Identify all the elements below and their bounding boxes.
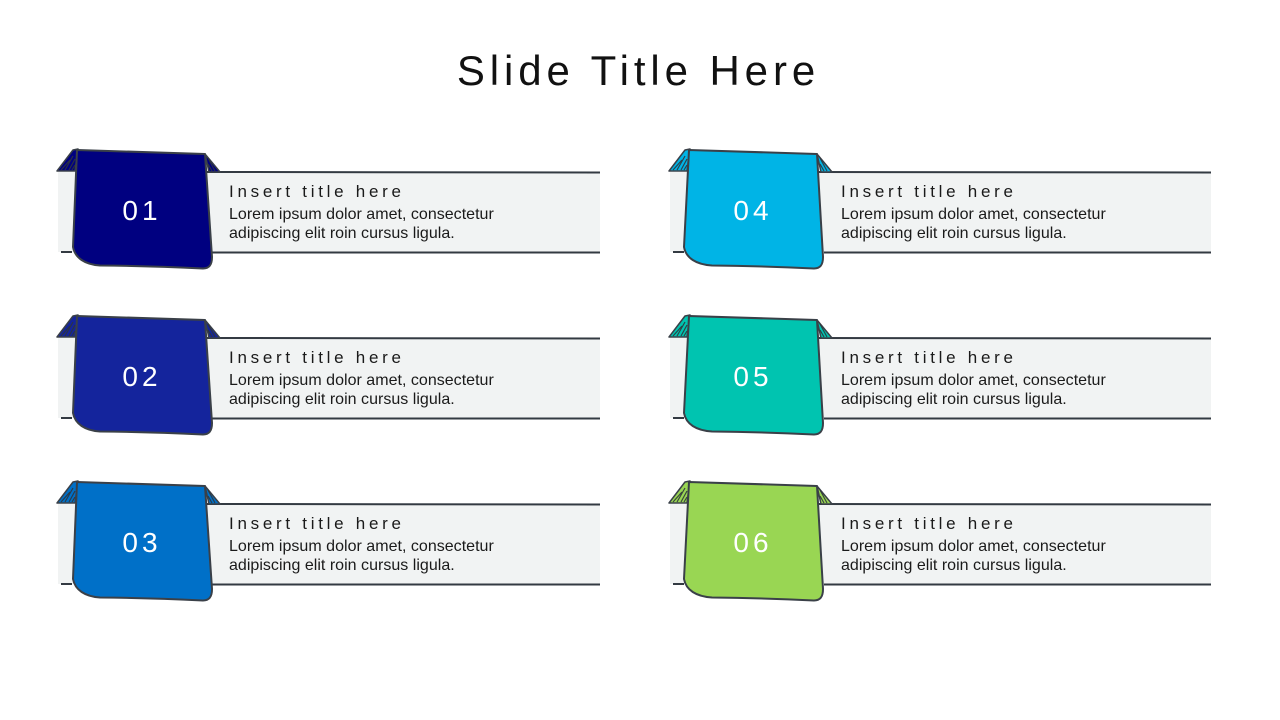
ribbon tab xyxy=(684,150,823,268)
panel: item 01 xyxy=(57,149,600,268)
item description: adipiscing elit roin cursus ligula. xyxy=(229,557,455,574)
item description: Lorem ipsum dolor amet, consectetur xyxy=(229,372,494,389)
panel: item 05 xyxy=(669,315,1211,434)
number: 06 xyxy=(733,527,773,558)
number: 04 xyxy=(733,195,773,226)
item heading: Insert title here xyxy=(841,514,1017,533)
item heading: Insert title here xyxy=(229,348,405,367)
text band xyxy=(670,338,1211,418)
text band xyxy=(670,504,1211,584)
title: Slide Title Here xyxy=(457,47,820,94)
panel: item 04 xyxy=(669,149,1211,268)
item description: Lorem ipsum dolor amet, consectetur xyxy=(229,538,494,555)
number: 03 xyxy=(122,527,162,558)
ribbon tab xyxy=(73,482,212,600)
ribbon tab xyxy=(684,482,823,600)
number: 01 xyxy=(122,195,162,226)
item description: adipiscing elit roin cursus ligula. xyxy=(229,225,455,242)
icon: ribbon folds xyxy=(57,149,220,172)
ribbon tab xyxy=(73,316,212,434)
icon: ribbon folds xyxy=(57,315,220,338)
item description: adipiscing elit roin cursus ligula. xyxy=(841,225,1067,242)
item heading: Insert title here xyxy=(841,182,1017,201)
item heading: Insert title here xyxy=(229,182,405,201)
item description: Lorem ipsum dolor amet, consectetur xyxy=(841,372,1106,389)
text band xyxy=(58,504,600,584)
panel: item 03 xyxy=(57,481,600,600)
panel: item 06 xyxy=(669,481,1211,600)
item description: adipiscing elit roin cursus ligula. xyxy=(841,391,1067,408)
text band xyxy=(58,172,600,252)
icon: ribbon folds xyxy=(669,481,832,504)
text band xyxy=(670,172,1211,252)
icon: ribbon folds xyxy=(57,481,220,504)
item heading: Insert title here xyxy=(841,348,1017,367)
number: 05 xyxy=(733,361,773,392)
icon: ribbon folds xyxy=(669,149,832,172)
ribbon tab xyxy=(73,150,212,268)
panel: item 02 xyxy=(57,315,600,434)
ribbon tab xyxy=(684,316,823,434)
item description: Lorem ipsum dolor amet, consectetur xyxy=(841,538,1106,555)
item heading: Insert title here xyxy=(229,514,405,533)
item description: adipiscing elit roin cursus ligula. xyxy=(229,391,455,408)
number: 02 xyxy=(122,361,162,392)
item description: Lorem ipsum dolor amet, consectetur xyxy=(229,206,494,223)
icon: ribbon folds xyxy=(669,315,832,338)
text band xyxy=(58,338,600,418)
item description: Lorem ipsum dolor amet, consectetur xyxy=(841,206,1106,223)
item description: adipiscing elit roin cursus ligula. xyxy=(841,557,1067,574)
